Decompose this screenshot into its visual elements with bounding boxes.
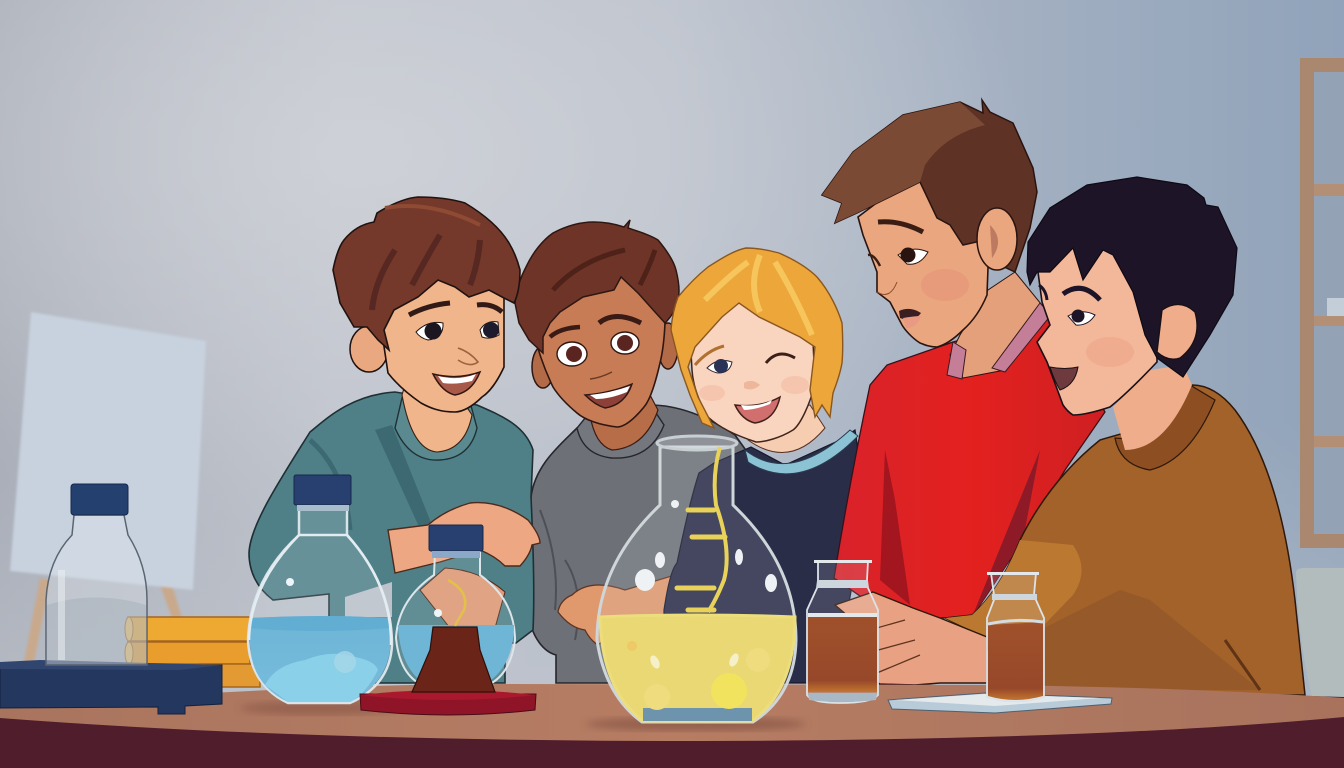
chair (1296, 568, 1344, 697)
hands (388, 503, 540, 573)
boy in grey sweater (515, 220, 760, 683)
hair (671, 248, 843, 428)
table (0, 684, 1344, 768)
tea jar right (987, 572, 1044, 702)
face (690, 280, 815, 442)
neck (402, 385, 472, 452)
swirl (708, 447, 727, 612)
canvas on easel (10, 312, 206, 662)
grey sweater (525, 405, 760, 683)
tea jar centre (807, 560, 878, 703)
small flask on red stand (360, 525, 536, 715)
eyes and mouth (1063, 288, 1100, 300)
face (858, 170, 988, 347)
large yellow flask (597, 436, 796, 722)
bookshelf (1300, 58, 1344, 548)
neck (1113, 365, 1192, 450)
hand (558, 575, 675, 645)
yellow books (125, 617, 260, 687)
hand on table (832, 592, 987, 685)
empty plastic bottle (46, 484, 147, 665)
ear (1157, 304, 1197, 359)
ear (350, 326, 388, 372)
boy in teal sweater (249, 197, 540, 683)
eyes and mouth (409, 303, 450, 315)
collar (947, 342, 966, 379)
eyes and mouth (695, 346, 724, 365)
ears (815, 342, 837, 388)
navy shirt (664, 430, 860, 683)
paper pad (888, 693, 1112, 713)
hair (515, 220, 679, 353)
eyes and mouth (550, 327, 580, 337)
navy tray left (0, 660, 222, 714)
neck (950, 272, 1050, 378)
hoodie (945, 385, 1305, 695)
tall boy in red sweater (822, 100, 1105, 618)
eyes and mouth (878, 222, 923, 232)
blond child in navy shirt (664, 248, 860, 683)
hair (1027, 177, 1237, 377)
red sweater (834, 315, 1105, 618)
ears (532, 346, 554, 388)
face (380, 250, 504, 412)
boy in brown hoodie (832, 177, 1305, 695)
hair (822, 100, 1037, 272)
face (1037, 230, 1157, 415)
gap of wall under the arm (345, 582, 392, 617)
blue liquid flask (248, 475, 392, 703)
face (533, 260, 665, 427)
teal sweater (249, 392, 534, 683)
ear (977, 208, 1017, 270)
hair (333, 197, 520, 350)
